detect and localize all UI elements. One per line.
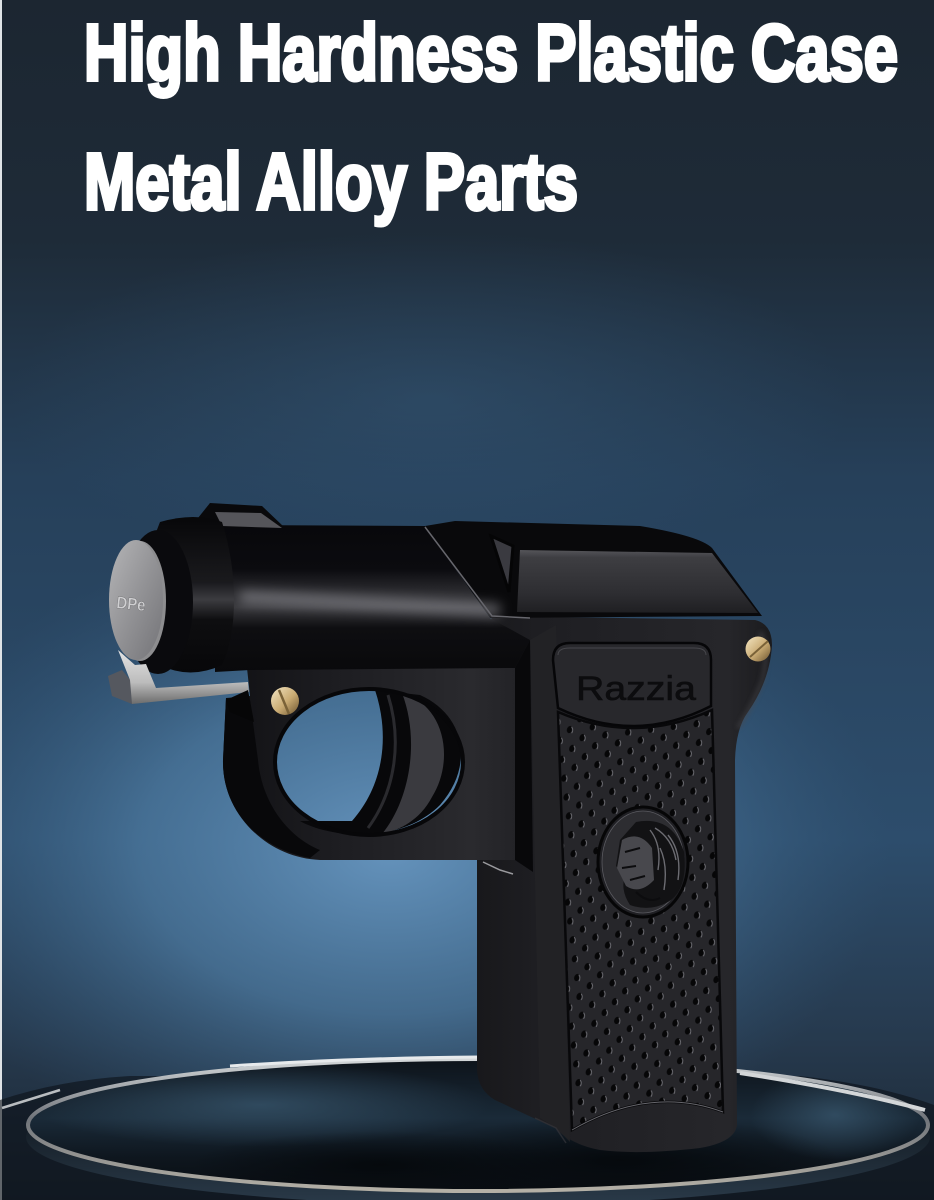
ejection window: [491, 536, 513, 592]
metal hinge latch: [108, 650, 249, 704]
grip body: [477, 616, 772, 1152]
display platform: [0, 1057, 934, 1200]
cap marking: DPe: [116, 593, 146, 615]
slide rear top band: [425, 521, 762, 618]
front sight: [198, 503, 284, 528]
pistol-shaped device: [108, 503, 772, 1152]
trigger assembly: [300, 690, 461, 835]
muzzle collar: [144, 517, 234, 672]
headline line 2: Metal Alloy Parts: [84, 137, 578, 226]
screw: rear: [746, 636, 770, 662]
trigger opening rim: [275, 689, 463, 835]
metal cap: [109, 540, 166, 661]
barrel: [215, 525, 530, 672]
muzzle inner ring: [123, 530, 193, 674]
screw: trigger guard: [271, 687, 299, 715]
small notch detail: [483, 862, 513, 874]
title text: [84, 8, 898, 226]
lion medallion: [598, 807, 688, 917]
textured grip panel: [558, 710, 723, 1130]
frame corner bevel: [515, 640, 533, 872]
barrel seam: [425, 527, 530, 618]
guard hinge shadow: [226, 690, 254, 722]
trigger guard frame: [223, 664, 515, 860]
logo plate: [553, 643, 711, 726]
guard left edge: [223, 698, 320, 858]
slide top face: [517, 550, 758, 613]
barrel highlight: [240, 597, 500, 610]
brand name: Razzia: [576, 670, 696, 708]
